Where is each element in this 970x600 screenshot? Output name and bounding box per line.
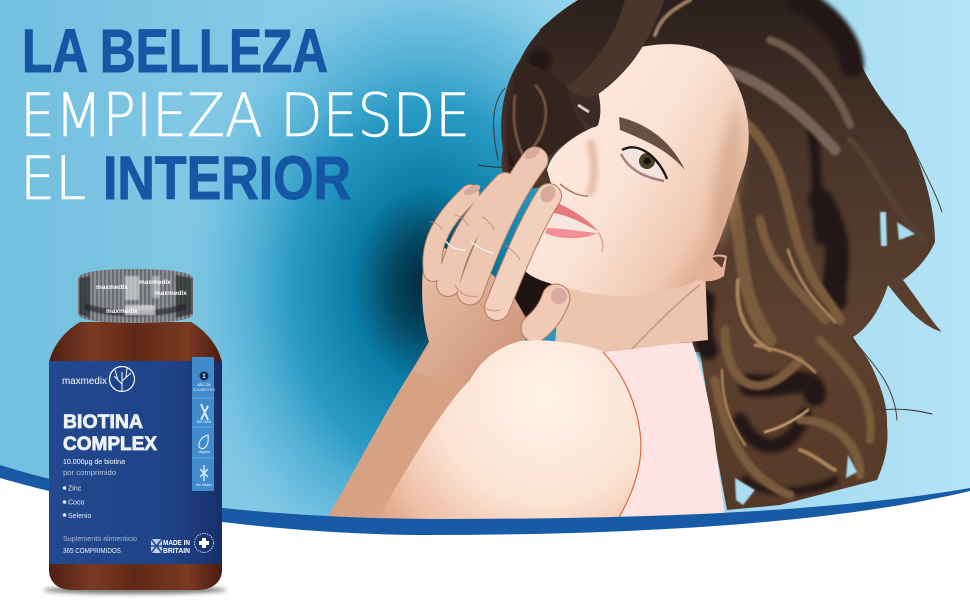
arm and hand with fingers and rings [327,145,567,519]
dosage text: 10.000µg de biotina [63,457,126,466]
nose shadow [588,140,594,195]
dosage text [63,457,126,477]
product name: BIOTINA [63,411,143,433]
bottle shadow [43,586,227,594]
forehead hair strand over face [566,0,664,97]
label side strip with icons [192,357,215,491]
title line 1: LA BELLEZA [22,17,328,85]
made in Britain badge: BRITAIN [163,546,190,555]
title line 3: INTERIOR [103,144,351,212]
brand logo [62,366,134,392]
label side strip with icons: SUMINISTRO [193,388,215,392]
fingernails [462,145,567,304]
label side strip with icons: 1 [202,374,206,380]
eye [621,147,667,181]
forearm [327,340,480,519]
label side strip with icons: AÑO DE [197,382,211,387]
supplement info: Suplemento alimenticio [63,534,137,543]
label side strip with icons: Sin Gluten [196,483,212,487]
flyaway hair wisps [478,5,942,420]
ear [695,254,727,281]
metallic cap: maxmedix [155,290,187,297]
bottom wave: blue band [0,465,970,600]
ingredient list: Zinc [68,486,82,492]
metallic cap: maxmedix [106,308,138,315]
dosage text: por comprimido [63,468,116,477]
hair shadow on temple [712,100,742,250]
strands: dark shadows [518,0,852,492]
product bottle: Biotina Complex [43,269,227,594]
finger outlines [432,160,556,328]
photo: smiling woman with curly brown hair [327,0,942,519]
label side strip with icons: Sin OGM [197,420,211,424]
title line 3 [20,144,351,214]
supplement info: 365 COMPRIMIDOS [63,546,121,555]
rings [446,241,494,253]
product name [63,411,157,455]
made in Britain badge [151,538,190,555]
eyebrow [619,117,685,170]
metallic cap [78,269,193,323]
strands: mid-brown [715,40,925,495]
amber glass body [49,322,222,590]
curls left of nose [507,62,585,172]
hair mass [478,0,942,510]
title [20,17,470,214]
fingers [432,160,556,328]
dark hollow behind hand [505,245,570,322]
face [523,44,749,296]
gaps in hair showing wall [735,212,915,505]
ingredient list: Coco [68,500,84,506]
far eye and side hair [572,96,600,127]
strands: golden highlights [605,0,835,470]
sleeveless top [603,342,725,519]
metallic cap: maxmedix [139,279,171,286]
title line 2: EMPIEZA DESDE [20,81,470,151]
title line 3: EL [20,144,86,214]
brand logo: maxmedix [62,375,108,387]
quality seal [194,534,214,552]
back of hand [412,245,530,385]
metallic cap: maxmedix [96,284,128,291]
blue label [49,361,222,564]
label side strip with icons: Vegano [198,450,210,454]
ingredient list [63,486,91,520]
product name: COMPLEX [63,433,157,455]
made in Britain badge: MADE IN [163,538,190,547]
back and shoulder [378,340,641,519]
supplement info [63,534,137,555]
knuckle shadows [430,215,520,311]
lips and teeth [545,203,603,252]
ingredient list: Selenio [68,513,91,520]
bottom wave: white base [0,478,970,600]
neck [555,268,708,358]
